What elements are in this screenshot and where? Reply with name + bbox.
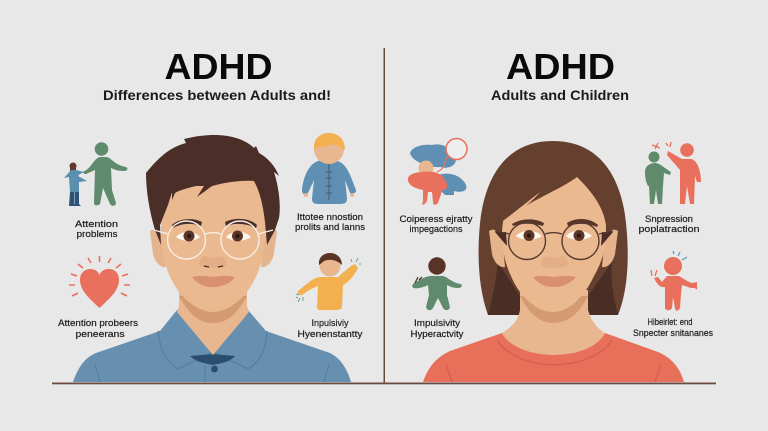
icon: red child — [651, 251, 697, 311]
title: left ADHD: ADHD — [164, 46, 272, 87]
label: Snpression poplattaction: poplatraction — [638, 224, 700, 234]
portrait: adult woman — [423, 141, 684, 382]
woman eyes — [516, 230, 592, 241]
label: attention probeers: peneerans — [76, 329, 125, 339]
woman brows — [512, 219, 598, 227]
label: Ittotte nnostion: prolits and lanns — [295, 222, 365, 232]
label: Impulsivity Hyenenstentty — [298, 318, 363, 339]
label: Impulsivity Hyperactivity: Impulsivity — [414, 318, 460, 328]
man ears — [150, 230, 277, 267]
woman nose — [541, 256, 568, 268]
label: attention problems: Attention — [75, 219, 118, 229]
label: Hieberlett end: Snpecter snitananes — [633, 328, 713, 338]
icon: orange child waving — [296, 253, 361, 310]
subtitle: right: Adults and Children — [491, 87, 629, 103]
label: attention problems — [75, 219, 118, 239]
woman shirt details — [446, 340, 661, 382]
woman sideburns — [495, 232, 613, 246]
label: Impulsivity Hyperactivity — [410, 318, 464, 339]
man glasses — [154, 221, 273, 259]
label: Snpression poplattaction: Snpression — [645, 214, 693, 224]
divider: baseline — [52, 382, 716, 384]
man hair — [146, 135, 280, 245]
man nose — [199, 256, 227, 268]
woman face — [502, 177, 606, 312]
label: Ittotte nnostion: Ittotee nnostion — [297, 212, 363, 222]
subtitle: left: Differences between Adults and! — [103, 87, 331, 103]
icon: heart with rays — [69, 256, 130, 308]
woman hair shadow — [488, 262, 618, 315]
divider: vertical — [384, 48, 385, 383]
label: Impulsivity Hyperactivity: Hyperactvity — [410, 329, 464, 339]
icon: blue shapes with magnifier — [408, 138, 467, 205]
woman glasses — [495, 222, 613, 260]
icon: blue-shirt child — [302, 133, 356, 204]
woman ears — [489, 230, 618, 267]
man mouth — [192, 276, 235, 287]
label: Impulsivity Hyenenstentty: Hyenenstantty — [298, 329, 363, 339]
title: right ADHD: ADHD — [506, 46, 615, 87]
label: Hieberlett end: Hibeirlet: end — [648, 317, 692, 327]
icon: adult and child — [64, 142, 127, 206]
woman neck — [502, 290, 605, 355]
label: attention problems: problems — [76, 229, 118, 239]
label: Copperess erratty: Coiperess ejratty — [400, 214, 473, 224]
man brows — [172, 219, 257, 228]
icon: two figures high five — [645, 142, 701, 204]
woman fringe — [503, 192, 540, 222]
man face — [161, 170, 267, 312]
man eyes — [176, 230, 251, 242]
label: Ittotte nnostion — [295, 212, 365, 232]
man neck — [177, 292, 249, 355]
portrait: adult man — [73, 135, 351, 382]
woman hair back — [479, 141, 628, 315]
label: attention probeers — [58, 318, 138, 339]
label: Hieberlett end — [633, 317, 713, 338]
man shirt — [73, 310, 351, 382]
label: attention probeers: Attention probeers — [58, 318, 138, 328]
label: Copperess erratty: impegactions — [410, 224, 463, 234]
icon: green child — [412, 257, 462, 310]
woman shirt — [423, 333, 684, 382]
label: Copperess erratty — [400, 214, 473, 234]
woman mouth — [533, 276, 576, 287]
label: Snpression poplattaction — [638, 214, 700, 234]
label: Impulsivity Hyenenstentty: Inpulsiviy — [312, 318, 349, 328]
